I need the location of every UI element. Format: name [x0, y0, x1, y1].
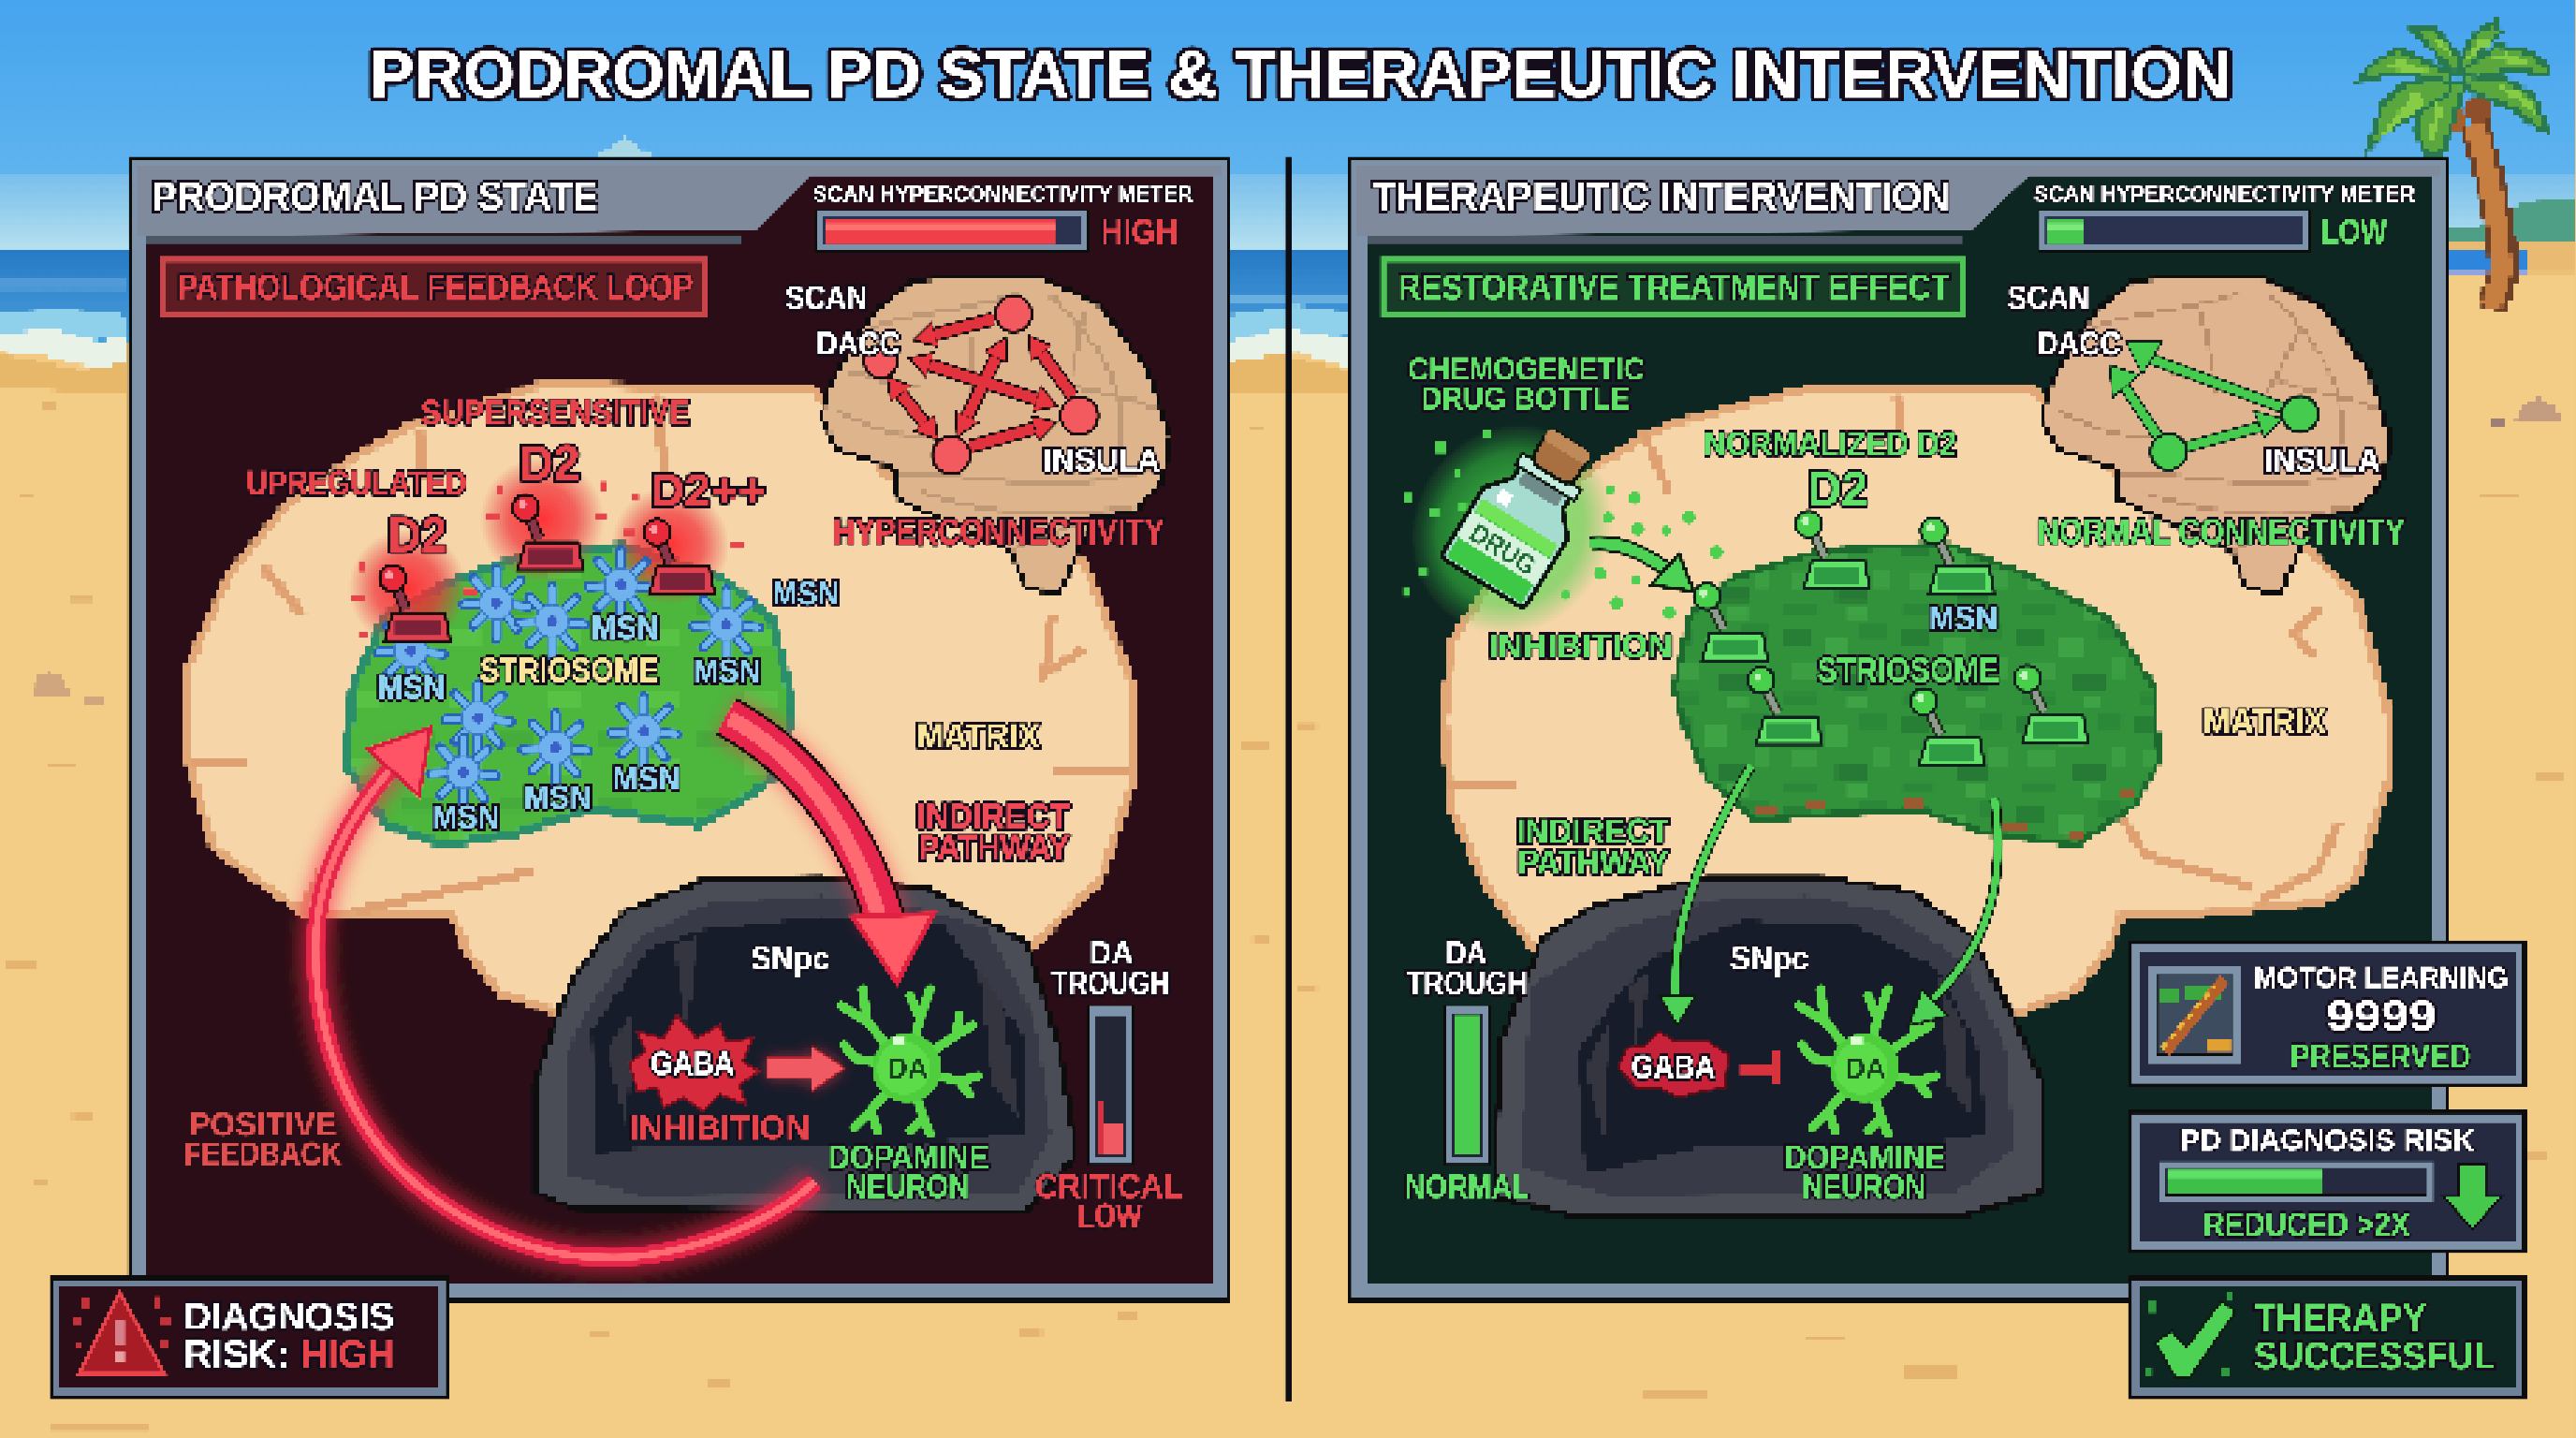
label: chemogenetic drug bottle	[1408, 352, 1645, 417]
stat card: motor learning: PRESERVED	[2291, 1037, 2471, 1076]
label: dopamine neuron	[828, 1139, 989, 1205]
centre divider	[1284, 156, 1292, 1401]
callout: therapy successful: THERAPY	[2254, 1297, 2426, 1340]
label: SCAN: SCAN	[785, 280, 868, 316]
panel frame	[1349, 156, 2450, 1303]
inhibition T-bar	[1740, 1050, 1781, 1084]
label: inhibition: INHIBITION	[629, 1109, 810, 1146]
striosome	[1674, 544, 2159, 844]
panel heading: THERAPEUTIC INTERVENTION	[1372, 174, 1950, 220]
MSN labels: MSN	[592, 610, 659, 647]
MSN labels: MSN	[694, 653, 761, 689]
callout: therapy successful: SUCCESSFUL	[2254, 1334, 2496, 1377]
arrow: drug to striosome	[1590, 543, 1694, 592]
palm tree	[2359, 22, 2550, 309]
arrow: to GABA	[1660, 766, 1751, 1025]
label: supersensitive: SUPERSENSITIVE	[420, 393, 690, 432]
arrow: positive feedback loop	[315, 728, 815, 1257]
dopamine neuron: DA	[887, 1050, 929, 1084]
label: dopamine neuron: NEURON	[1802, 1168, 1925, 1205]
label: striosome: STRIOSOME	[479, 651, 659, 689]
D2 receptor levers	[1694, 511, 2088, 766]
striosome	[345, 546, 792, 844]
label: dACC: DACC	[816, 326, 900, 362]
arrow: to dopamine neuron	[1909, 799, 1998, 1025]
label: striosome: STRIOSOME	[1817, 651, 1999, 689]
DA trough gauge: DA	[1090, 935, 1134, 972]
MSN labels: MSN	[772, 576, 840, 612]
label: matrix: MATRIX	[2203, 702, 2327, 741]
callout: diagnosis risk high	[50, 1275, 448, 1400]
DA trough gauge	[1405, 935, 1530, 1205]
label: indirect pathway: INDIRECT	[1516, 812, 1670, 850]
label: positive feedback: FEEDBACK	[184, 1136, 343, 1172]
label: dACC: DACC	[2037, 326, 2121, 362]
label: SNpc: SNpc	[1730, 941, 1808, 977]
MSN labels: MSN	[524, 780, 592, 816]
label: dopamine neuron: NEURON	[846, 1168, 970, 1205]
hyperconnectivity meter	[813, 182, 1193, 252]
label: indirect pathway: INDIRECT	[916, 798, 1070, 836]
DA trough gauge: TROUGH	[1406, 965, 1528, 1002]
icon: drug bottle	[1370, 385, 1652, 673]
loop banner	[163, 259, 705, 314]
label: insula: INSULA	[1043, 443, 1160, 479]
big brain	[1444, 388, 2389, 1012]
network: normal connectivity arrows	[2110, 342, 2318, 470]
DA trough gauge: LOW	[1077, 1196, 1142, 1235]
MSN labels: MSN	[378, 669, 446, 706]
big brain	[189, 385, 1134, 1012]
label: SCAN: SCAN	[2008, 280, 2089, 316]
hyperconnectivity meter: LOW	[2321, 213, 2387, 251]
small brain scan	[2042, 276, 2391, 594]
icon: down arrow	[2443, 1164, 2502, 1229]
cave: SNpc	[1493, 877, 2043, 1216]
callout: diagnosis risk high: RISK:	[184, 1332, 289, 1375]
stat card: PD diagnosis risk: REDUCED >2X	[2203, 1207, 2410, 1243]
panel: prodromal PD state	[128, 156, 1231, 1303]
label: upregulated: UPREGULATED	[246, 463, 466, 502]
hyperconnectivity meter	[2034, 182, 2415, 252]
callout: diagnosis risk high: DIAGNOSIS	[184, 1295, 394, 1338]
hyperconnectivity meter: SCAN HYPERCONNECTIVITY METER	[813, 182, 1193, 206]
GABA burst	[1618, 1032, 1728, 1097]
DA trough gauge: CRITICAL	[1035, 1167, 1183, 1205]
MSN neurons	[378, 550, 759, 809]
icon: warning triangle	[72, 1293, 171, 1373]
DA trough gauge: TROUGH	[1051, 965, 1170, 1002]
inhibition arrow	[768, 1047, 844, 1091]
DA trough gauge: NORMAL	[1405, 1168, 1530, 1205]
network: hyperconnectivity arrows	[864, 296, 1098, 474]
label: D2 left: D2	[388, 508, 446, 564]
icon: check mark	[2145, 1292, 2236, 1377]
DA trough gauge	[1035, 935, 1183, 1235]
loop banner: PATHOLOGICAL FEEDBACK LOOP	[178, 267, 694, 306]
label: dopamine neuron: DOPAMINE	[1784, 1139, 1945, 1176]
stat card: PD diagnosis risk: PD DIAGNOSIS RISK	[2180, 1123, 2474, 1157]
cave: SNpc	[534, 877, 1076, 1211]
stat card: motor learning: MOTOR LEARNING	[2254, 961, 2509, 994]
dopamine neuron: DA	[1845, 1050, 1886, 1084]
label: chemogenetic drug bottle: CHEMOGENETIC	[1408, 352, 1645, 387]
label: indirect pathway: PATHWAY	[918, 829, 1070, 867]
label: indirect pathway	[1516, 812, 1670, 882]
arrow: indirect pathway to neuron	[726, 716, 933, 983]
hyperconnectivity meter: HIGH	[1101, 213, 1178, 251]
label: D2 middle: D2	[520, 435, 580, 491]
D2 receptor levers	[379, 494, 714, 640]
label: indirect pathway	[916, 798, 1070, 867]
label: hyperconnectivity: HYPERCONNECTIVITY	[833, 512, 1165, 552]
label: matrix: MATRIX	[916, 717, 1040, 756]
callout: therapy successful	[2128, 1275, 2526, 1400]
label: dopamine neuron: DOPAMINE	[828, 1139, 989, 1176]
panel heading: PRODROMAL PD STATE	[151, 174, 598, 220]
DA trough gauge: DA	[1445, 935, 1486, 972]
title: PRODROMAL PD STATE & THERAPEUTIC INTERVENTION	[370, 37, 2231, 111]
MSN labels: MSN	[432, 800, 500, 836]
label: insula: INSULA	[2264, 443, 2380, 479]
GABA burst: GABA	[651, 1046, 735, 1082]
panel: therapeutic intervention	[1349, 156, 2450, 1303]
risk bar	[2159, 1162, 2433, 1201]
label: SNpc: SNpc	[751, 941, 829, 977]
label: positive feedback	[184, 1107, 343, 1172]
label: inhibition: INHIBITION	[1488, 628, 1673, 665]
panel frame	[128, 156, 1231, 1303]
small brain scan	[822, 276, 1170, 594]
stat card: motor learning	[2128, 940, 2526, 1088]
icon: drug bottle: DRUG	[1464, 518, 1542, 581]
icon: skill thumbnail	[2149, 966, 2241, 1064]
label: dopamine neuron	[1784, 1139, 1945, 1205]
MSN labels	[378, 576, 840, 836]
drug particles	[1403, 429, 1723, 620]
label: chemogenetic drug bottle: DRUG BOTTLE	[1421, 382, 1630, 417]
stat card: motor learning: 9999	[2326, 991, 2437, 1039]
callout: diagnosis risk high: HIGH	[300, 1332, 394, 1375]
label: indirect pathway: PATHWAY	[1518, 844, 1669, 882]
label: MSN: MSN	[1928, 600, 1998, 637]
GABA burst	[629, 1016, 759, 1110]
dopamine neuron	[1799, 990, 1936, 1134]
treatment banner	[1383, 259, 1963, 314]
MSN labels: MSN	[613, 761, 681, 798]
label: normalized D2: NORMALIZED D2	[1704, 426, 1956, 462]
label: positive feedback: POSITIVE	[189, 1107, 337, 1143]
label: D2: D2	[1808, 462, 1868, 518]
label: normal connectivity: NORMAL CONNECTIVITY	[2037, 512, 2406, 552]
stat card: PD diagnosis risk	[2128, 1109, 2526, 1254]
hyperconnectivity meter: SCAN HYPERCONNECTIVITY METER	[2034, 182, 2415, 206]
D2 glows	[348, 457, 744, 648]
label: D2++: D2++	[651, 466, 766, 517]
dopamine neuron	[842, 990, 977, 1134]
GABA burst: GABA	[1632, 1049, 1715, 1085]
treatment banner: RESTORATIVE TREATMENT EFFECT	[1398, 267, 1950, 306]
